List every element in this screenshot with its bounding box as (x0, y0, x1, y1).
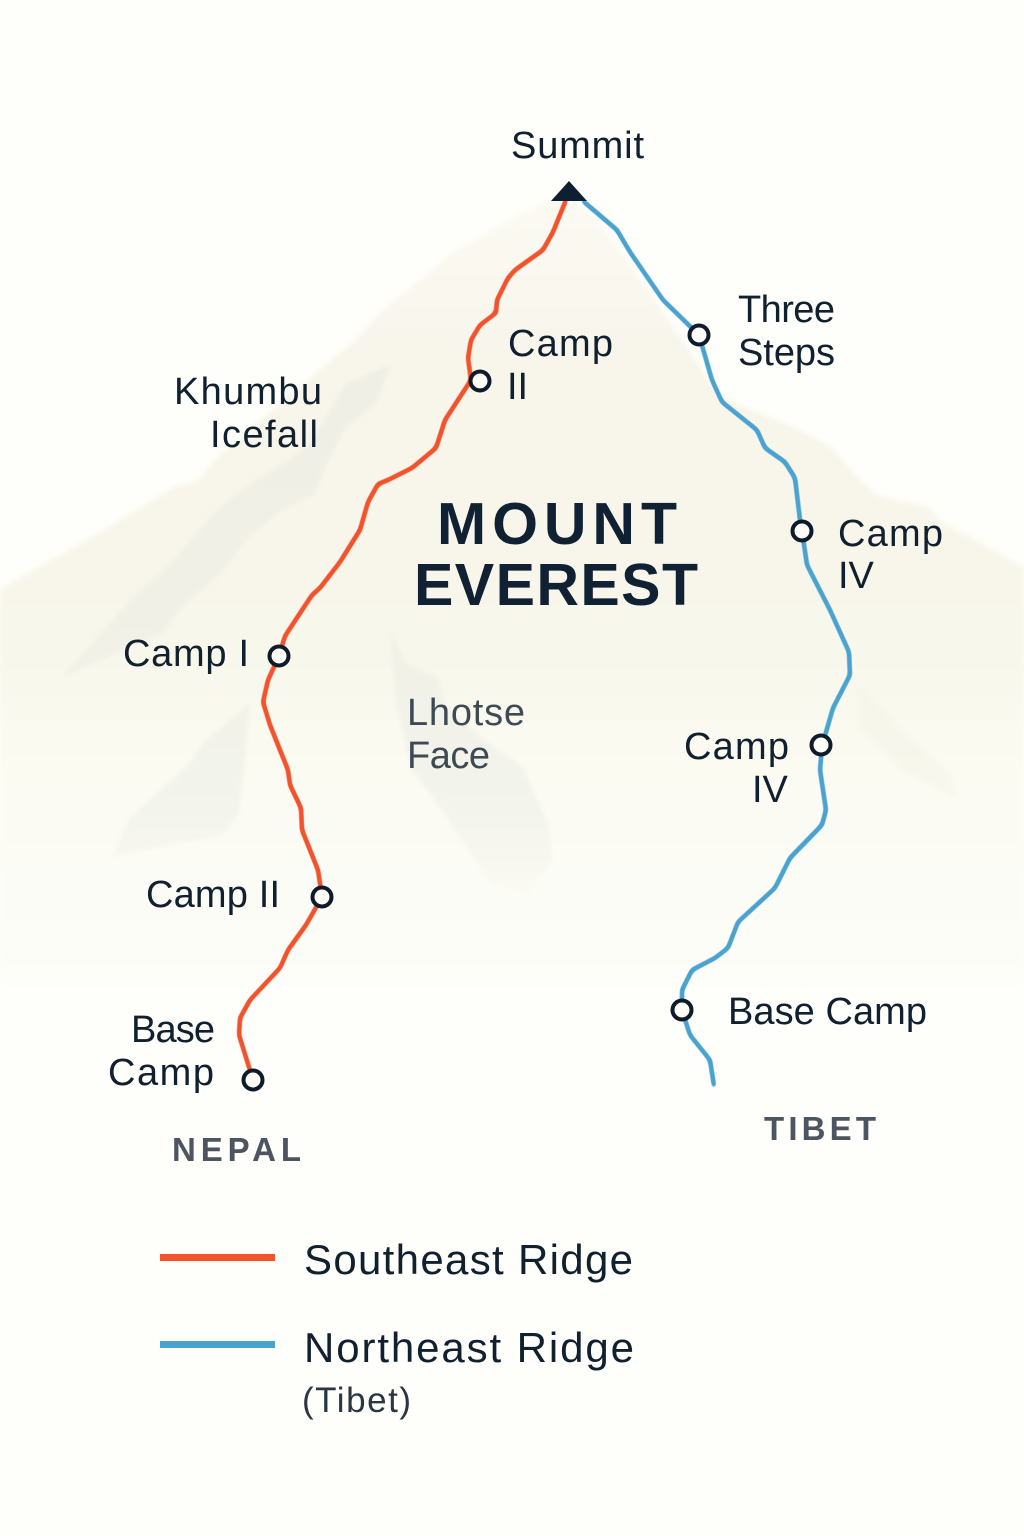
label: three steps: Three (738, 289, 835, 331)
rock shading: right flank (856, 683, 960, 800)
rock shading: lower spur (111, 703, 250, 857)
label: camp II upper: Camp (508, 323, 613, 365)
label: summit: Summit (511, 125, 644, 167)
label: lhotse face (407, 692, 525, 777)
label: three steps (738, 289, 835, 374)
label: camp II upper (507, 323, 613, 408)
southeast ridge route line (239, 200, 566, 1080)
label: camp IV lower (684, 726, 789, 811)
label: base camp nepal: Camp (108, 1052, 214, 1094)
label: lhotse face: Face (407, 735, 490, 777)
mountain silhouette (0, 192, 1024, 1010)
label: camp IV upper (838, 513, 943, 597)
label: nepal: NEPAL (172, 1131, 301, 1168)
northeast ridge route line (583, 201, 850, 1086)
label: khumbu icefall (174, 371, 322, 456)
label: camp II lower: Camp II (146, 874, 280, 916)
label: camp I: Camp I (123, 633, 249, 675)
label: tibet: TIBET (764, 1110, 876, 1147)
title (414, 491, 698, 618)
legend (160, 1236, 634, 1420)
label: camp IV lower: Camp (684, 726, 789, 768)
label: khumbu icefall: Khumbu (174, 371, 322, 413)
waypoint markers (244, 326, 830, 1090)
label: base camp nepal (108, 1009, 215, 1094)
label: three steps: Steps (738, 332, 835, 374)
label: base camp tibet: Base Camp (728, 991, 927, 1033)
title: MOUNT (437, 491, 677, 557)
label: camp II upper: II (507, 366, 528, 408)
title: EVEREST (414, 552, 698, 618)
label: camp IV lower: IV (752, 769, 789, 811)
label: camp IV upper: IV (838, 555, 875, 597)
summit marker (551, 181, 587, 201)
label: lhotse face: Lhotse (407, 692, 525, 734)
legend: southeast ridge: Southeast Ridge (304, 1236, 633, 1283)
legend: northeast ridge: (Tibet) (302, 1381, 411, 1420)
rock shading: Lhotse Face (391, 635, 552, 893)
rock shading: Khumbu Icefall (62, 363, 392, 677)
legend: northeast ridge (160, 1324, 634, 1420)
label: camp IV upper: Camp (838, 513, 943, 555)
legend: southeast ridge (160, 1236, 633, 1283)
label: khumbu icefall: Icefall (210, 414, 318, 456)
label: base camp nepal: Base (131, 1009, 215, 1051)
legend: northeast ridge: Northeast Ridge (304, 1324, 634, 1371)
